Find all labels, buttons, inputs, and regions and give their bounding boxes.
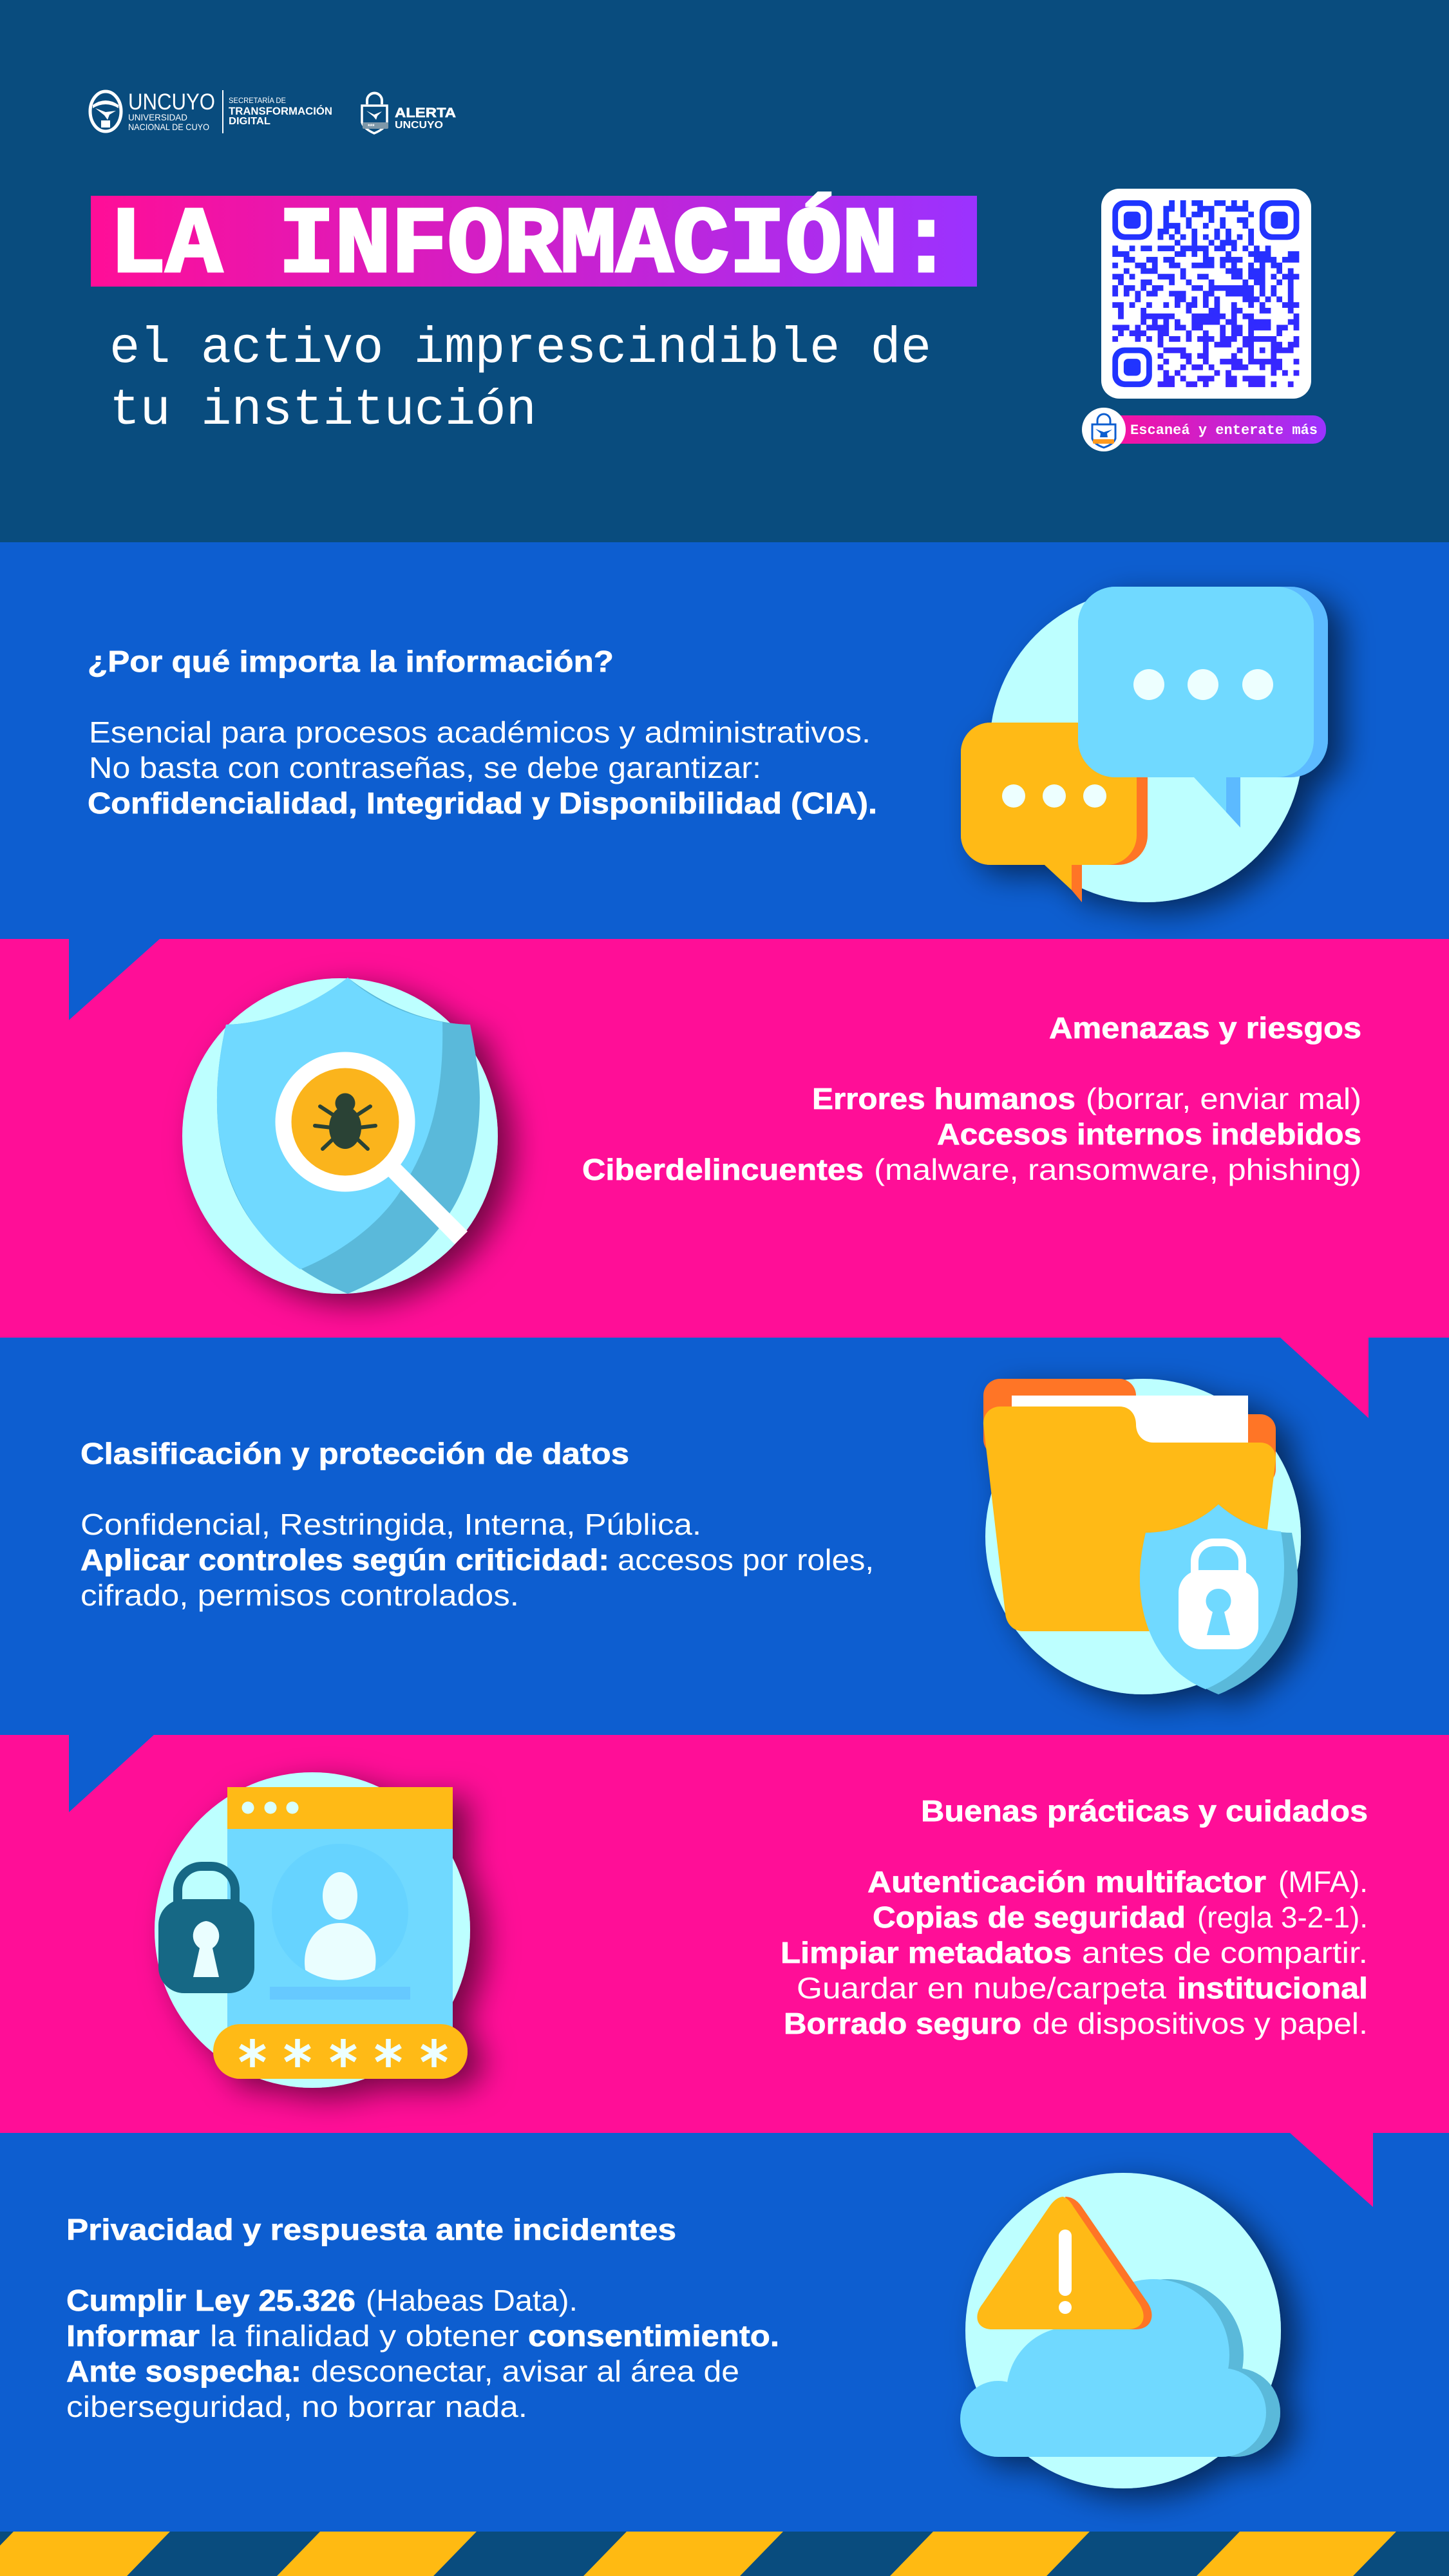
text block: institucional xyxy=(1177,1971,1368,2005)
logos: UNCUYO and Alerta xyxy=(90,90,456,133)
icon: Alerta padlock shield xyxy=(362,93,388,133)
text block: Cumplir Ley 25.326 xyxy=(66,2284,355,2317)
text block xyxy=(80,1508,874,1612)
icon: Alerta lock badge xyxy=(1082,408,1126,451)
text block: Autenticación multifactor xyxy=(867,1865,1266,1899)
text block: Informar xyxy=(66,2319,200,2353)
subtitle: el activo imprescindible de xyxy=(109,319,931,377)
text block: Guardar en nube/carpeta xyxy=(797,1971,1166,2005)
text block: la finalidad y obtener xyxy=(210,2319,519,2353)
icon: login window with lock and password xyxy=(155,1772,470,2088)
icon: folder with lock shield xyxy=(983,1379,1301,1694)
wordmark: UNCUYO: NACIONAL DE CUYO xyxy=(128,122,209,132)
text block xyxy=(66,2284,779,2423)
text block: Aplicar controles según criticidad: xyxy=(80,1543,609,1577)
panel: privacy and incident response xyxy=(0,2133,1449,2532)
text block: Errores humanos xyxy=(812,1082,1075,1115)
wordmark: Secretaría de Transformación Digital: DIGITAL xyxy=(229,116,270,127)
wordmark: Secretaría de Transformación Digital: SECRETARÍA DE xyxy=(229,97,286,105)
panel: threats and risks xyxy=(0,939,1449,1338)
panel: data classification and protection xyxy=(0,1338,1449,1735)
text block: consentimiento. xyxy=(528,2319,779,2353)
text block: Confidencialidad, Integridad y Disponibilidad (CIA). xyxy=(88,786,877,820)
text block: ciberseguridad, no borrar nada. xyxy=(66,2390,527,2423)
heading: ¿Por qué importa la información? xyxy=(88,645,614,678)
text block: No basta con contraseñas, se debe garantizar: xyxy=(89,751,761,784)
text block: Confidencial, Restringida, Interna, Pública. xyxy=(80,1508,701,1541)
text block xyxy=(88,715,877,820)
callout: scan pill: Escaneá y enterate más xyxy=(1130,422,1318,439)
panel: header background xyxy=(0,0,1449,542)
wordmark: Alerta UNCUYO: UNCUYO xyxy=(395,120,443,131)
text block: de dispositivos y papel. xyxy=(1032,2007,1368,2040)
heading: Clasificación y protección de datos xyxy=(80,1437,629,1470)
icon: shield with magnifier and bug xyxy=(182,978,498,1294)
text block: desconectar, avisar al área de xyxy=(311,2354,739,2388)
text block: accesos por roles, xyxy=(618,1543,874,1577)
text block: Accesos internos indebidos xyxy=(937,1117,1361,1151)
subtitle xyxy=(109,319,931,439)
subtitle: tu institución xyxy=(109,381,536,439)
icon: warning triangle over cloud xyxy=(960,2173,1281,2488)
title: LA INFORMACIÓN: xyxy=(109,192,954,299)
text block: (Habeas Data). xyxy=(366,2284,578,2317)
wordmark: Alerta UNCUYO: ALERTA xyxy=(395,106,456,120)
wordmark: Secretaría de Transformación Digital xyxy=(229,97,332,127)
wordmark: Secretaría de Transformación Digital: TRANSFORMACIÓN xyxy=(229,105,332,117)
text block: Esencial para procesos académicos y administrativos. xyxy=(89,715,871,749)
heading: Buenas prácticas y cuidados xyxy=(921,1794,1368,1828)
text block: Copias de seguridad xyxy=(873,1900,1186,1934)
text block: (borrar, enviar mal) xyxy=(1086,1082,1361,1115)
text block: Ante sospecha: xyxy=(66,2354,301,2388)
text block: (regla 3-2-1). xyxy=(1197,1900,1368,1934)
heading: Amenazas y riesgos xyxy=(1049,1011,1361,1045)
hazard stripe footer xyxy=(0,2532,1449,2576)
text block: (malware, ransomware, phishing) xyxy=(874,1153,1361,1186)
text block: Limpiar metadatos xyxy=(781,1936,1072,1969)
heading: Privacidad y respuesta ante incidentes xyxy=(66,2213,676,2246)
text block: Ciberdelincuentes xyxy=(582,1153,864,1186)
text block: Borrado seguro xyxy=(784,2007,1021,2040)
panel: why information matters xyxy=(0,542,1449,939)
wordmark: UNCUYO: UNCUYO xyxy=(128,90,215,115)
text block xyxy=(582,1082,1361,1186)
icon: Alerta padlock shield: *** xyxy=(368,123,375,129)
text block: (MFA). xyxy=(1278,1865,1368,1899)
text block: cifrado, permisos controlados. xyxy=(80,1578,519,1612)
callout: scan pill xyxy=(1082,408,1326,451)
panel: good practices xyxy=(0,1734,1449,2133)
wordmark: UNCUYO xyxy=(128,90,215,132)
wordmark: Alerta UNCUYO xyxy=(395,106,456,131)
text block xyxy=(781,1865,1368,2040)
QR code xyxy=(1101,189,1311,399)
icon: chat bubbles xyxy=(961,587,1328,902)
text block: antes de compartir. xyxy=(1082,1936,1368,1969)
icon: UNCUYO emblem xyxy=(90,91,121,131)
wordmark: UNCUYO: UNIVERSIDAD xyxy=(128,112,187,122)
